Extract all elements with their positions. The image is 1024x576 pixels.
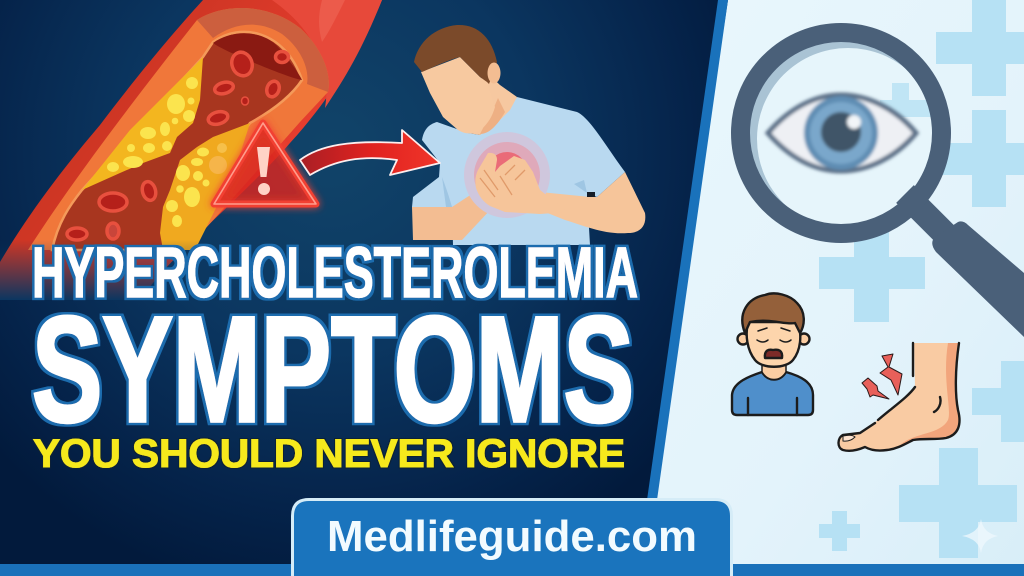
lens: [750, 42, 930, 206]
closed eyes and brows: [757, 328, 791, 342]
artery wall: [28, 8, 329, 250]
handle grip: [932, 221, 1024, 337]
exclamation mark: [257, 147, 270, 195]
background medical crosses: [819, 0, 1024, 558]
torso: [732, 372, 813, 415]
arrow pointing to chest: [300, 130, 440, 175]
toenail: [843, 435, 855, 441]
icon: tired boy: [732, 293, 813, 415]
icon: magnifying glass with blurred eye: [740, 32, 1024, 337]
plaque: lower: [160, 123, 250, 250]
man holding chest: [412, 25, 645, 245]
neck shadow: [480, 98, 505, 134]
head: [747, 322, 800, 367]
website badge: [292, 500, 732, 576]
ears: [738, 334, 748, 344]
pain rings on chest: [464, 132, 550, 218]
neck: [468, 70, 517, 135]
right arm: [535, 172, 645, 233]
icon: foot with pain bolts: [838, 343, 960, 451]
title: Symptoms: SYMPTOMS: [32, 285, 634, 453]
artery illustration: [0, 0, 382, 300]
watch strap: [587, 192, 595, 197]
hair: [414, 25, 497, 84]
face: [421, 57, 495, 133]
fat globules: [107, 77, 227, 227]
sparkle watermark: [962, 519, 998, 553]
artery fade behind title: [0, 240, 205, 300]
neck: [762, 362, 786, 380]
panel: light background: [640, 0, 1024, 576]
website url: Medlifeguide.com: [327, 512, 697, 561]
ear: [488, 62, 500, 84]
pain bolts: [862, 354, 902, 399]
hair: [742, 293, 804, 333]
diagonal blue divider: [647, 0, 728, 500]
artery lumen: [52, 32, 302, 250]
panel: dark navy background: [0, 0, 740, 576]
red blood cells: [67, 49, 288, 240]
title: Hypercholesterolemia: HYPERCHOLESTEROLEMIA: [32, 234, 638, 313]
blurred eye: [768, 95, 916, 171]
lens ring: [740, 32, 942, 234]
plaque: upper: [82, 57, 203, 190]
foot outline: [838, 343, 960, 451]
heel shade: [900, 343, 960, 445]
subtitle: YOU SHOULD NEVER IGNORE: [33, 432, 625, 476]
foot: [838, 343, 960, 451]
open mouth: [765, 350, 782, 358]
icon: red warning triangle: [214, 123, 316, 204]
artery outer tube: [0, 0, 382, 300]
hands on chest: [475, 153, 568, 214]
handle neck: [905, 194, 948, 237]
t-shirt: [412, 97, 625, 245]
bottom blue strip: [0, 564, 1024, 576]
left forearm: [412, 190, 492, 240]
